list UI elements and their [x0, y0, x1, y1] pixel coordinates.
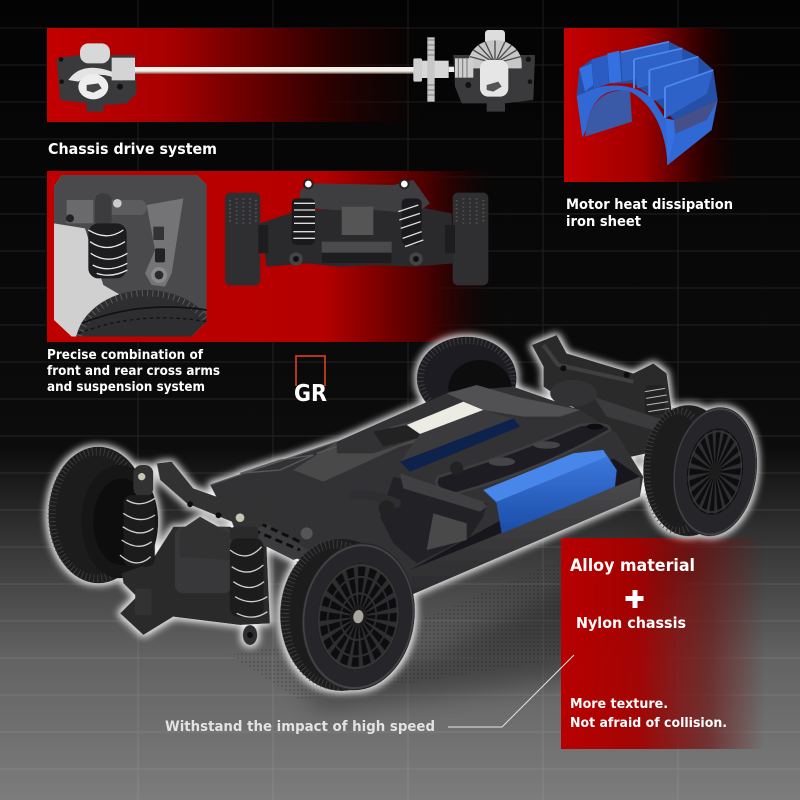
- text: motor heat dissipation: [566, 197, 733, 230]
- text: more texture: More texture.: [570, 696, 668, 712]
- car chassis: [48, 335, 765, 698]
- tray floor: [410, 458, 640, 572]
- text: nylon chassis: Nylon chassis: [576, 614, 686, 632]
- panel: motor heat dissipation: [564, 28, 738, 182]
- tray edge: [410, 477, 640, 594]
- far right wheel: [417, 337, 517, 420]
- heading: chassis drive system: Chassis drive system: [48, 140, 217, 158]
- text: suspension description: Precise combination of: [47, 347, 203, 363]
- side frame: [380, 477, 487, 563]
- red gradient panel: [47, 171, 495, 342]
- icon: plus: [626, 590, 644, 608]
- panel: chassis drive system: [47, 28, 535, 122]
- callout: withstand impact: [165, 655, 574, 735]
- battery strap frame: [436, 424, 610, 493]
- text: motor heat dissipation: iron sheet: [566, 214, 641, 230]
- panel: suspension: [47, 171, 488, 342]
- motor: [407, 402, 483, 434]
- right front shock: [230, 527, 267, 645]
- text: more texture: [570, 696, 727, 731]
- text: alloy material: Alloy material: [570, 556, 695, 576]
- callout: withstand impact: Withstand the impact of high speed: [165, 719, 435, 735]
- near front wheel: [280, 536, 424, 698]
- rear shock tower and rear assembly: [532, 335, 672, 460]
- battery: [483, 450, 617, 533]
- red gradient panel: [47, 28, 425, 122]
- icon: blue heat sink: [577, 42, 718, 165]
- car shadow halftone: [230, 520, 700, 710]
- left front shock: [120, 465, 155, 567]
- text: suspension description: and suspension system: [47, 379, 205, 395]
- far left front wheel: [48, 447, 158, 583]
- front shock tower: [157, 462, 276, 535]
- text: more texture: Not afraid of collision.: [570, 715, 727, 731]
- logo: GR: [294, 356, 327, 407]
- red gradient panel: [564, 28, 738, 182]
- front view of suspension: [225, 180, 488, 285]
- text: suspension description: front and rear cross arms: [47, 363, 220, 379]
- front assembly: [120, 462, 313, 645]
- panel: alloy material: [561, 538, 765, 749]
- main chassis body: [210, 385, 643, 594]
- drive shaft with gearboxes: [57, 30, 535, 112]
- suspension close-up photo: [54, 175, 488, 337]
- near right wheel: [643, 402, 765, 542]
- text: motor heat dissipation: Motor heat dissipation: [566, 197, 733, 213]
- text: suspension description: [47, 347, 220, 395]
- logo: GR: GR: [294, 381, 327, 407]
